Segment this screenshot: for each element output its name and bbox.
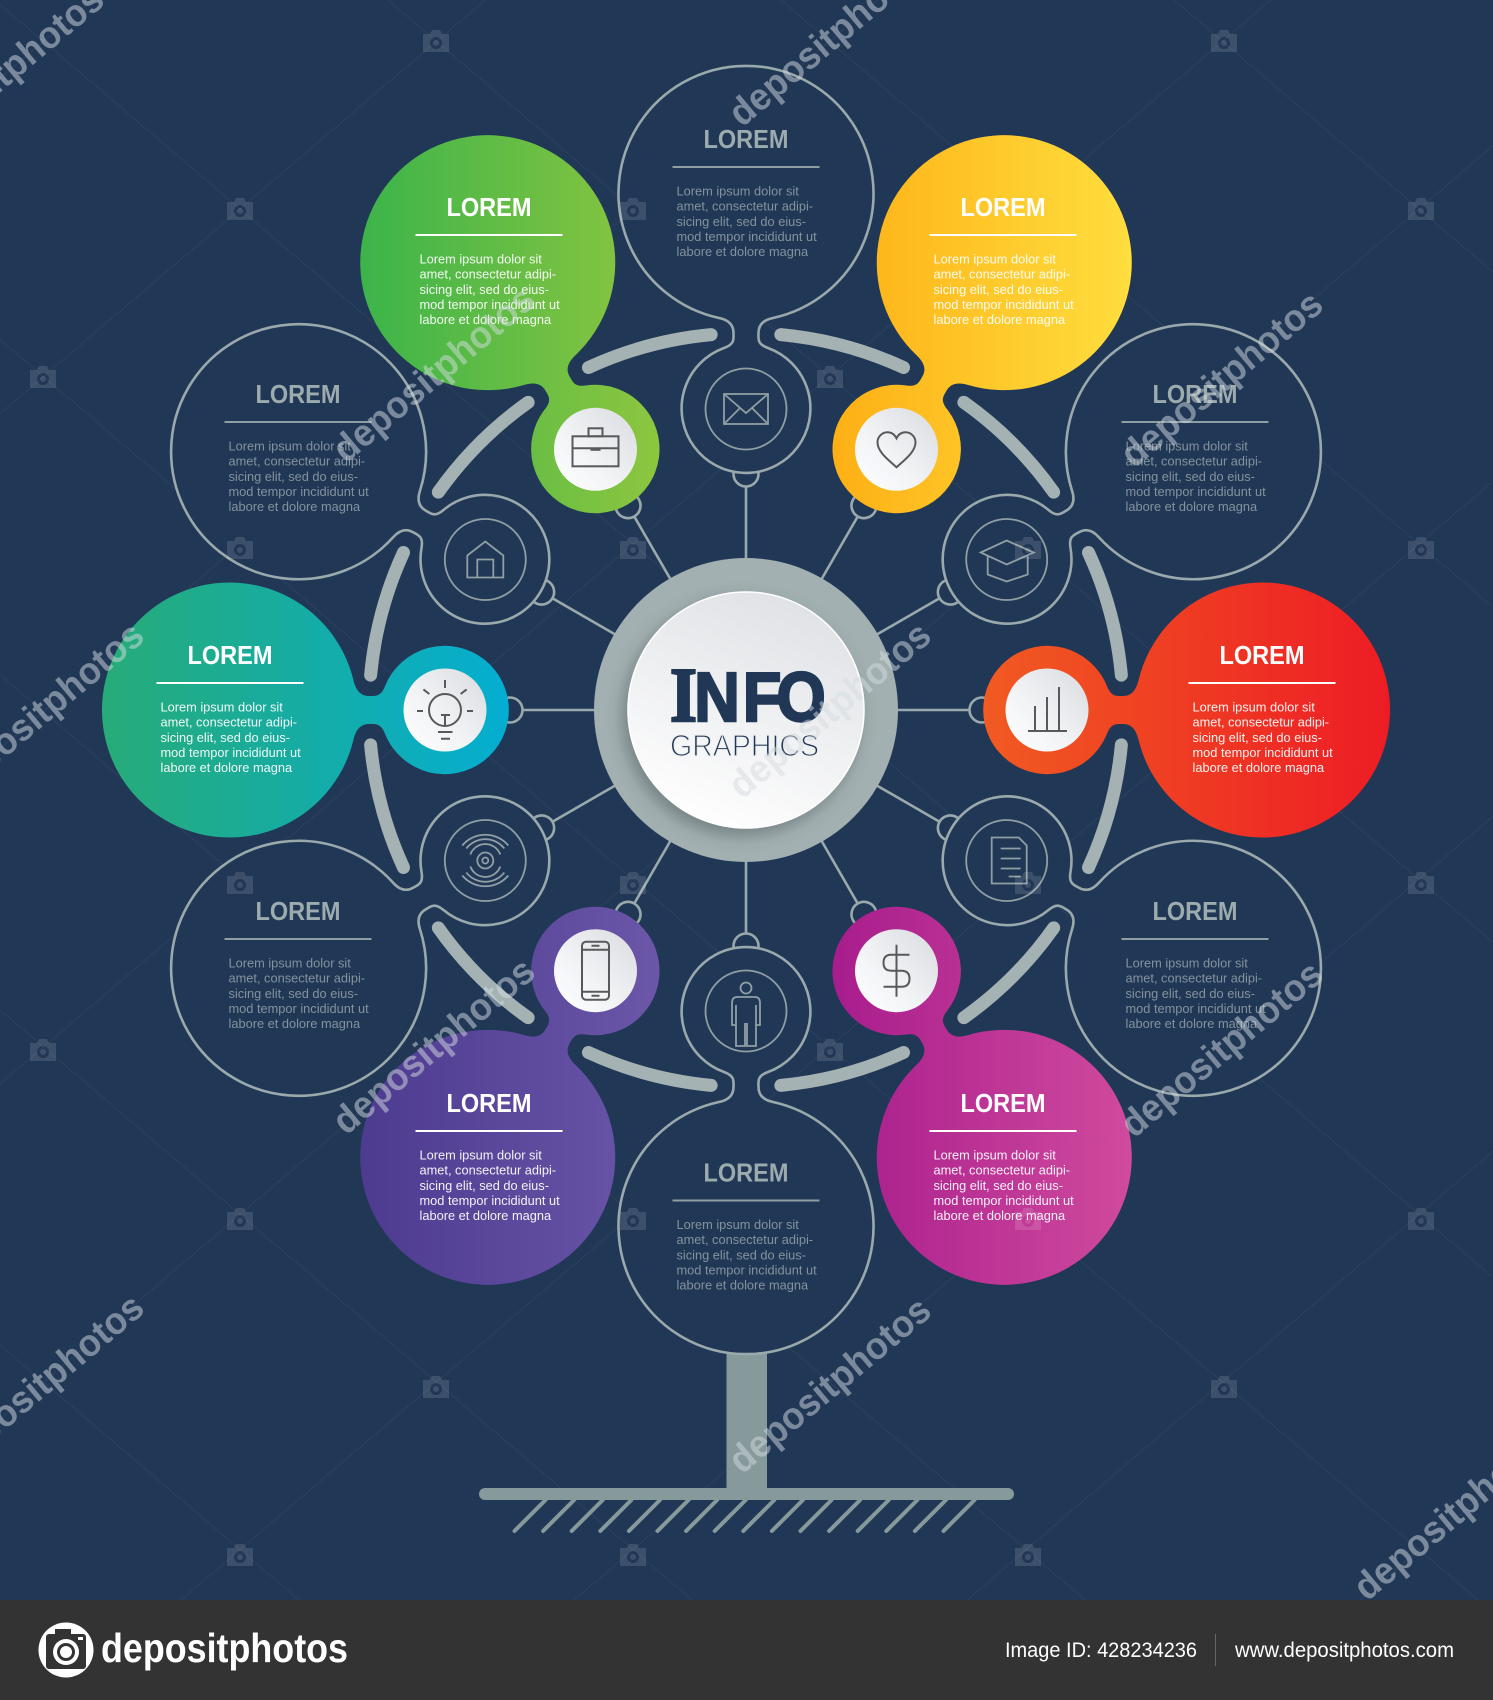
text block: sicing elit, sed do eius- xyxy=(934,1178,1063,1193)
text block: mod tempor incididunt ut xyxy=(934,297,1074,312)
text block: sicing elit, sed do eius- xyxy=(676,214,806,229)
icon: heart xyxy=(855,408,938,491)
text block: sicing elit, sed do eius- xyxy=(228,986,358,1001)
text block: Lorem ipsum dolor sit xyxy=(160,700,283,714)
text block: Lorem ipsum dolor sit xyxy=(1192,700,1315,714)
title: INFO: I xyxy=(670,653,697,738)
node shape xyxy=(314,89,738,568)
node outline xyxy=(888,718,1368,1142)
text block: amet, consectetur adipi- xyxy=(420,1163,556,1178)
text block: sicing elit, sed do eius- xyxy=(160,730,290,745)
node outline xyxy=(618,947,874,1354)
text block: mod tempor incididunt ut xyxy=(228,484,369,499)
node shape xyxy=(754,89,1178,568)
text block: Lorem ipsum dolor sit xyxy=(1126,956,1248,970)
text block: sicing elit, sed do eius- xyxy=(1192,730,1322,745)
text block: Lorem ipsum dolor sit xyxy=(1126,438,1248,454)
node outline xyxy=(888,278,1368,702)
watermark text: depositphotos xyxy=(1113,283,1331,476)
panel: magenta node xyxy=(754,852,1178,1331)
outer ring xyxy=(594,558,898,862)
text block: labore et dolore magna xyxy=(1126,499,1258,514)
text block: Lorem ipsum dolor sit xyxy=(676,184,799,198)
text block: amet, consectetur adipi- xyxy=(1126,971,1262,986)
icon: document xyxy=(966,820,1047,901)
text block: amet, consectetur adipi- xyxy=(228,454,365,469)
text block: Lorem ipsum dolor sit xyxy=(676,1217,799,1232)
text block: Lorem ipsum dolor sit xyxy=(228,956,351,970)
text block: amet, consectetur adipi- xyxy=(676,1232,813,1247)
text block: sicing elit, sed do eius- xyxy=(420,282,549,297)
icon: envelope xyxy=(706,368,786,450)
text block: labore et dolore magna xyxy=(934,312,1066,327)
heading: LOREM xyxy=(1152,896,1238,926)
text block: amet, consectetur adipi- xyxy=(228,971,365,986)
title: INFO: F xyxy=(743,659,781,737)
heading: LOREM xyxy=(1152,379,1238,409)
logo icon: camera xyxy=(38,1622,94,1678)
heading: LOREM xyxy=(704,124,788,154)
text block: amet, consectetur adipi- xyxy=(676,199,813,214)
text block: mod tempor incididunt ut xyxy=(676,1262,817,1278)
text block: labore et dolore magna xyxy=(160,760,293,775)
heading: LOREM xyxy=(446,192,532,222)
text block: labore et dolore magna xyxy=(1126,1016,1258,1031)
node outline xyxy=(124,278,604,702)
text block: sicing elit, sed do eius- xyxy=(1126,986,1255,1001)
text block: mod tempor incididunt ut xyxy=(1126,1001,1266,1016)
white disc xyxy=(628,592,864,828)
watermark text: depositphotos xyxy=(325,278,543,471)
panel: green node xyxy=(314,89,738,568)
text block: mod tempor incididunt ut xyxy=(676,229,817,244)
watermark text: depositphotos xyxy=(1113,953,1331,1146)
text block: Lorem ipsum dolor sit xyxy=(420,252,542,266)
text block: mod tempor incididunt ut xyxy=(228,1001,369,1016)
text block: labore et dolore magna xyxy=(420,312,552,327)
text block: mod tempor incididunt ut xyxy=(420,297,560,312)
panel: lower right outline node xyxy=(888,718,1368,1142)
text block: Lorem ipsum dolor sit xyxy=(934,252,1056,266)
text block: amet, consectetur adipi- xyxy=(1192,715,1329,730)
heading: LOREM xyxy=(960,1088,1046,1118)
footer bar xyxy=(0,1600,1493,1700)
panel: bottom outline node xyxy=(618,947,874,1354)
icon: graduation cap xyxy=(966,519,1047,600)
text block: mod tempor incididunt ut xyxy=(420,1193,560,1208)
text block: amet, consectetur adipi- xyxy=(1126,454,1262,469)
node shape xyxy=(754,852,1178,1331)
node shape xyxy=(102,582,509,838)
text block: labore et dolore magna xyxy=(676,1278,809,1293)
panel: upper left outline node xyxy=(124,278,604,702)
heading: LOREM xyxy=(446,1088,532,1118)
text block: labore et dolore magna xyxy=(420,1208,552,1223)
text block: mod tempor incididunt ut xyxy=(934,1193,1074,1208)
icon: briefcase xyxy=(554,408,637,491)
text block: mod tempor incididunt ut xyxy=(1192,745,1333,760)
panel: upper right outline node xyxy=(888,278,1368,702)
heading: LOREM xyxy=(1220,640,1304,670)
watermark text: depositphotos xyxy=(721,614,939,807)
connector lines and knobs xyxy=(498,462,994,958)
panel: purple node xyxy=(314,852,738,1331)
node outline xyxy=(618,66,874,473)
text block: sicing elit, sed do eius- xyxy=(228,469,358,484)
text block: sicing elit, sed do eius- xyxy=(676,1247,806,1262)
grey arcs between nodes xyxy=(365,329,1127,1091)
text block: labore et dolore magna xyxy=(228,499,361,514)
icon: person xyxy=(706,970,786,1052)
panel: red node xyxy=(983,582,1390,838)
text block: labore et dolore magna xyxy=(228,1016,361,1031)
node outline xyxy=(124,718,604,1142)
heading: LOREM xyxy=(256,379,340,409)
text block: labore et dolore magna xyxy=(1192,760,1325,775)
text block: sicing elit, sed do eius- xyxy=(1126,469,1255,484)
image id: Image ID: 428234236 xyxy=(1005,1639,1197,1662)
text block: labore et dolore magna xyxy=(934,1208,1066,1223)
panel: teal node xyxy=(102,582,509,838)
text block: labore et dolore magna xyxy=(676,244,809,259)
icon: home xyxy=(445,519,526,600)
central hub xyxy=(594,558,898,862)
text block: Lorem ipsum dolor sit xyxy=(420,1148,542,1162)
text block: mod tempor incididunt ut xyxy=(1126,484,1266,499)
heading: LOREM xyxy=(256,896,340,926)
text block: amet, consectetur adipi- xyxy=(934,267,1070,282)
tree trunk xyxy=(726,1352,767,1492)
heading: LOREM xyxy=(960,192,1046,222)
icon: signal xyxy=(445,820,526,901)
watermark text: depositphotos xyxy=(325,950,543,1143)
panel: yellow node xyxy=(754,89,1178,568)
icon: light bulb xyxy=(404,668,486,752)
logo wordmark: depositphotos xyxy=(101,1625,348,1671)
text block: sicing elit, sed do eius- xyxy=(934,282,1063,297)
website url: www.depositphotos.com xyxy=(1234,1639,1454,1662)
node shape xyxy=(314,852,738,1331)
heading: LOREM xyxy=(704,1158,788,1188)
text block: mod tempor incididunt ut xyxy=(160,745,301,760)
panel: top outline node xyxy=(618,66,874,473)
text block: Lorem ipsum dolor sit xyxy=(934,1148,1056,1162)
ground xyxy=(479,1488,1014,1531)
icon: dollar xyxy=(855,929,938,1012)
subtitle: GRAPHICS: GRAPHICS xyxy=(670,728,819,763)
text block: Lorem ipsum dolor sit xyxy=(228,438,351,454)
title: INFO: N xyxy=(694,659,740,737)
watermark text: depositphotos xyxy=(721,1289,939,1482)
node shape xyxy=(983,582,1390,838)
heading: LOREM xyxy=(188,640,272,670)
icon: bar chart xyxy=(1006,668,1088,752)
text block: amet, consectetur adipi- xyxy=(160,715,297,730)
title: INFO: O xyxy=(777,659,826,737)
panel: lower left outline node xyxy=(124,718,604,1142)
icon: smartphone xyxy=(554,929,637,1012)
text block: amet, consectetur adipi- xyxy=(934,1163,1070,1178)
text block: sicing elit, sed do eius- xyxy=(420,1178,549,1193)
text block: amet, consectetur adipi- xyxy=(420,267,556,282)
